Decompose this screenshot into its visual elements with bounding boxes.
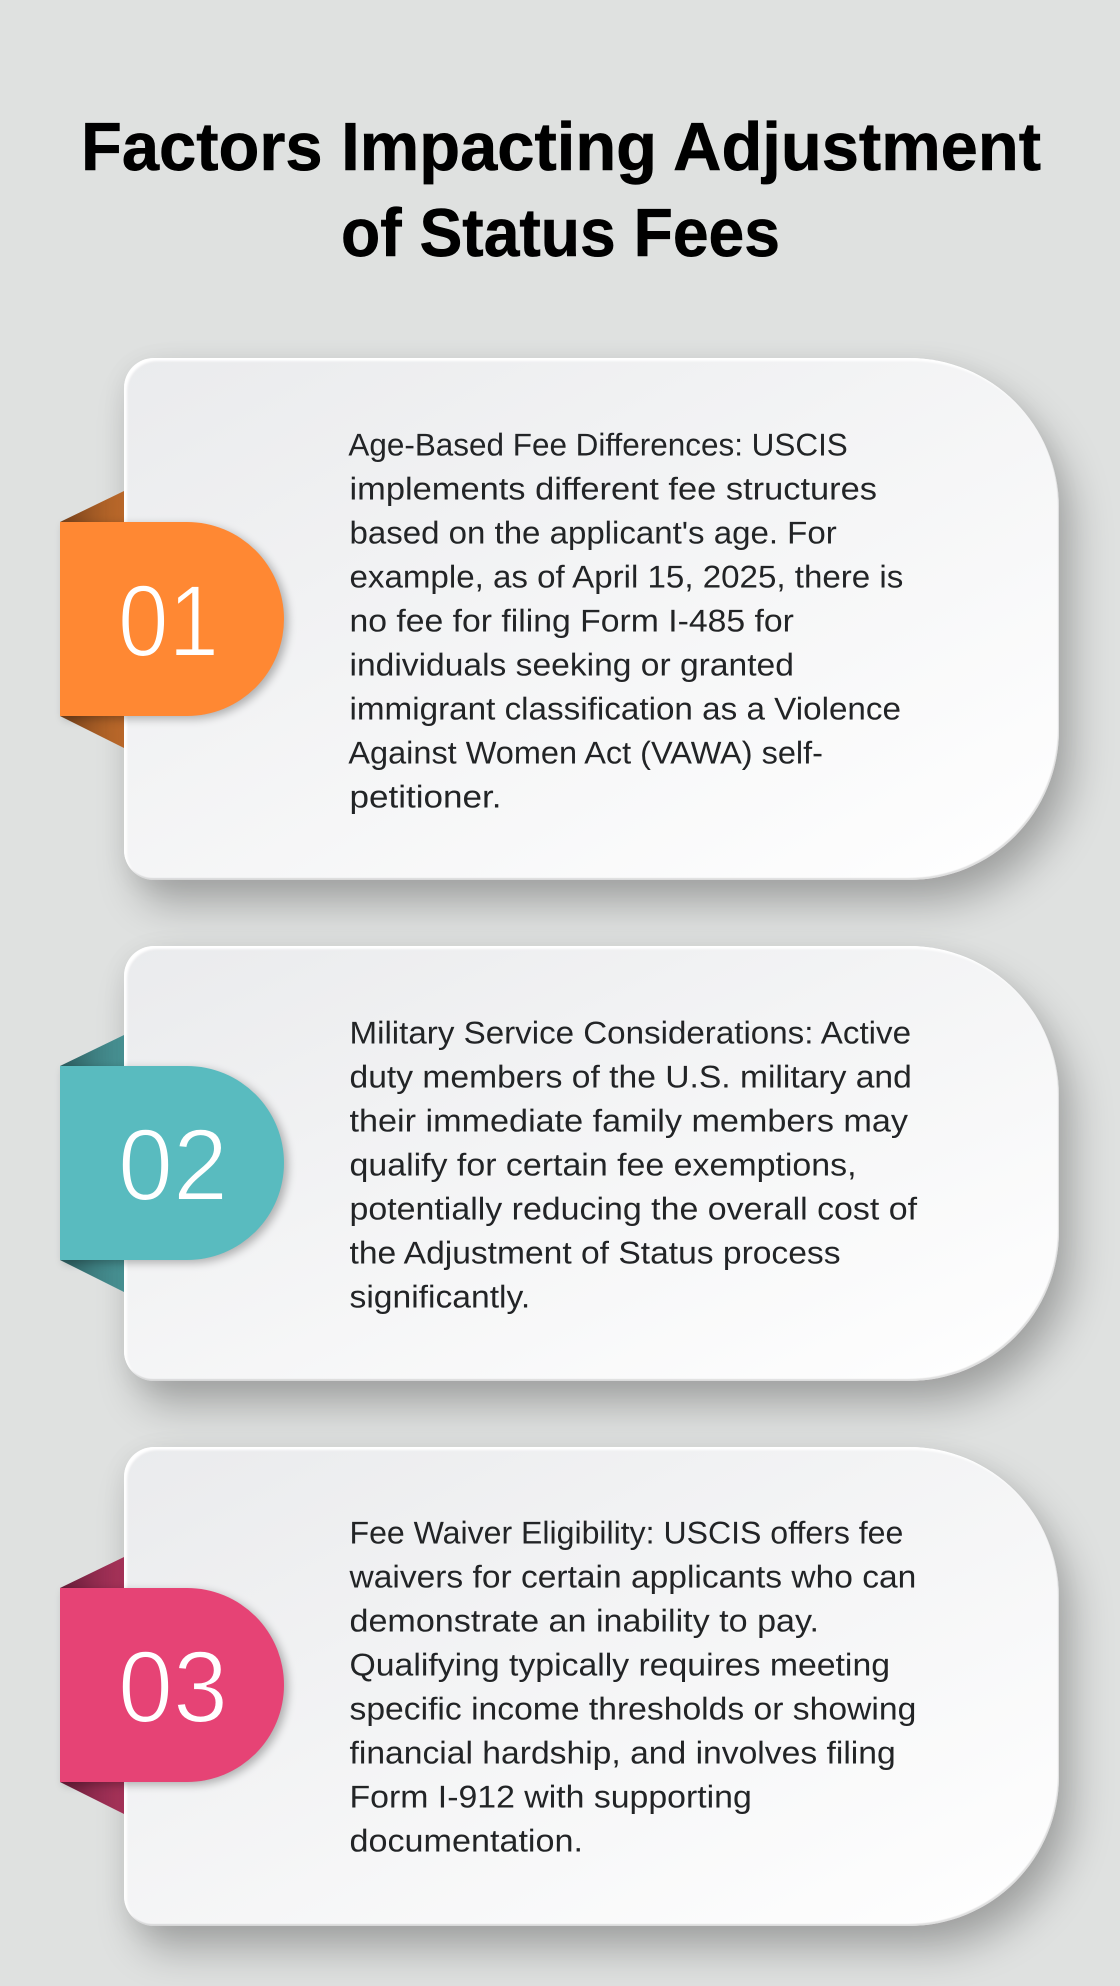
text block 03: Qualifying typically requires meeting (350, 1646, 890, 1682)
panel: factor 02 military service considerations (60, 942, 1094, 1426)
text block 01: Age-Based Fee Differences: USCIS (348, 427, 848, 463)
text block 02: potentially reducing the overall cost of (350, 1191, 917, 1227)
panel: factor 01 age-based fee differences (60, 354, 1094, 924)
text block 02: qualify for certain fee exemptions, (350, 1147, 856, 1183)
card 03 (124, 1447, 1059, 1926)
text block 03: documentation. (350, 1822, 583, 1858)
text block 02 (350, 1015, 918, 1315)
text block 03: Fee Waiver Eligibility: USCIS offers fee (350, 1514, 903, 1550)
badge 03 (60, 1588, 284, 1782)
card 02 (124, 946, 1059, 1381)
text block 01: petitioner. (350, 779, 502, 815)
text block 01: immigrant classification as a Violence (350, 691, 901, 727)
title (81, 109, 1041, 271)
text block 02: duty members of the U.S. military and (350, 1059, 912, 1095)
text block 03 (348, 1514, 916, 1858)
badge 03: 03 (118, 1630, 228, 1744)
ribbon folds 02 (60, 1035, 124, 1292)
text block 01: no fee for filing Form I-485 for (350, 603, 794, 639)
badge 01: 01 (118, 564, 219, 678)
badge 02 (60, 1066, 284, 1260)
ribbon folds 01 (60, 491, 124, 748)
title: Factors Impacting Adjustment (81, 109, 1041, 185)
ribbon folds 03 (60, 1557, 124, 1814)
card 01 (124, 358, 1059, 880)
text block 03: Form I-912 with supporting (350, 1778, 752, 1814)
text block 01 (348, 427, 903, 815)
text block 03: demonstrate an inability to pay. (350, 1602, 819, 1638)
text block 03: waivers for certain applicants who can (348, 1558, 916, 1594)
text block 01: Against Women Act (VAWA) self- (348, 735, 823, 771)
text block 01: based on the applicant's age. For (350, 515, 837, 551)
title: of Status Fees (341, 195, 780, 271)
text block 03: specific income thresholds or showing (350, 1690, 916, 1726)
text block 01: example, as of April 15, 2025, there is (350, 559, 903, 595)
text block 02: the Adjustment of Status process (350, 1235, 840, 1271)
text block 02: Military Service Considerations: Active (350, 1015, 911, 1051)
badge 01 (60, 522, 284, 716)
text block 02: significantly. (350, 1279, 530, 1315)
badge 02: 02 (118, 1108, 228, 1222)
text block 01: individuals seeking or granted (350, 647, 794, 683)
text block 03: financial hardship, and involves filing (350, 1734, 896, 1770)
text block 02: their immediate family members may (350, 1103, 908, 1139)
panel: factor 03 fee waiver eligibility (60, 1443, 1094, 1970)
text block 01: implements different fee structures (350, 471, 877, 507)
